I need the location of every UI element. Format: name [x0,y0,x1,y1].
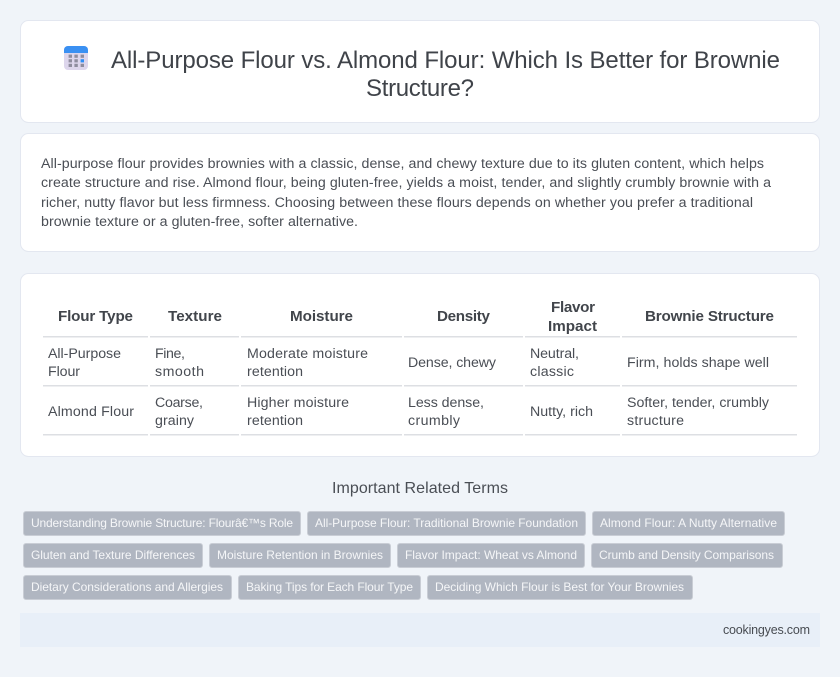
tag: Understanding Brownie Structure: Flourâ€™s Role [31,516,293,530]
tag [592,512,784,536]
table row: all-purpose flour: retention [247,364,303,380]
table row: all-purpose flour: All-Purpose [48,346,121,362]
tag [428,576,692,600]
panel: comparison table [20,274,820,456]
tag [308,512,586,536]
table header row: Impact [548,318,597,335]
panel: header [20,20,820,122]
table row: all-purpose flour: Fine, [155,346,185,362]
table row: almond flour: Higher moisture [247,395,349,411]
tag [592,544,782,568]
tag [24,512,300,536]
title: All-Purpose Flour vs. Almond Flour: Which Is Better for Brownie [111,47,780,74]
tag: Flavor Impact: Wheat vs Almond [405,548,577,562]
footer [20,613,820,647]
table row: all-purpose flour: Dense, chewy [408,355,497,371]
tag: Almond Flour: A Nutty Alternative [600,516,777,530]
table row: almond flour [48,395,770,429]
table row: almond flour: grainy [155,413,195,429]
title: Structure? [366,75,474,102]
table header row: Flavor [551,299,595,316]
table row: all-purpose flour: Neutral, [530,346,579,362]
table row: almond flour: crumbly [408,413,461,429]
table header row [58,299,774,335]
tag [238,576,420,600]
table header row: Density [437,308,491,325]
tag: All-Purpose Flour: Traditional Brownie Foundation [315,516,578,530]
tag [210,544,390,568]
tag: Crumb and Density Comparisons [599,548,774,562]
table row: all-purpose flour: Firm, holds shape well [627,355,769,371]
text block: intro: create structure and rise. Almond flour, being gluten-free, yields a moist, tender, and slightly crumbly brownie with a [41,175,771,191]
panel: intro paragraph [20,134,820,252]
table row: all-purpose flour [48,346,769,380]
icon: calendar [64,46,88,70]
table row: almond flour: Nutty, rich [530,404,593,420]
tag: Dietary Considerations and Allergies [31,580,223,594]
table row: almond flour: structure [627,413,684,429]
table row: all-purpose flour: smooth [155,364,204,380]
table row: all-purpose flour: Moderate moisture [247,346,368,362]
table row: almond flour: Almond Flour [48,404,134,420]
tag [398,544,584,568]
table row: all-purpose flour: Flour [48,364,80,380]
table header row: Moisture [290,308,353,325]
table row: all-purpose flour: classic [530,364,574,380]
table header row: Texture [168,308,222,325]
tag: Deciding Which Flour is Best for Your Brownies [435,580,684,594]
table row: almond flour: Less dense, [408,395,484,411]
text block: intro: All-purpose flour provides brownies with a classic, dense, and chewy texture due to its gluten content, which helps [41,156,764,172]
text block: intro [41,156,771,230]
tag: Gluten and Texture Differences [31,548,195,562]
text block: intro: richer, nutty flavor but less firmness. Choosing between these flours depends on whether you prefer a traditional [41,195,753,211]
footer: cookingyes.com [723,623,810,637]
table header row: Brownie Structure [645,308,774,325]
tag list [24,512,784,600]
tag: Baking Tips for Each Flour Type [246,580,413,594]
title [111,47,780,102]
tag [24,576,232,600]
heading: important related terms: Important Related Terms [332,480,508,497]
tag [24,544,202,568]
tag: Moisture Retention in Brownies [217,548,383,562]
table row: almond flour: retention [247,413,303,429]
table header row: Flour Type [58,308,133,325]
table row: almond flour: Softer, tender, crumbly [627,395,770,411]
text block: intro: brownie texture or a gluten-free, softer alternative. [41,214,358,230]
table row: almond flour: Coarse, [155,395,203,411]
